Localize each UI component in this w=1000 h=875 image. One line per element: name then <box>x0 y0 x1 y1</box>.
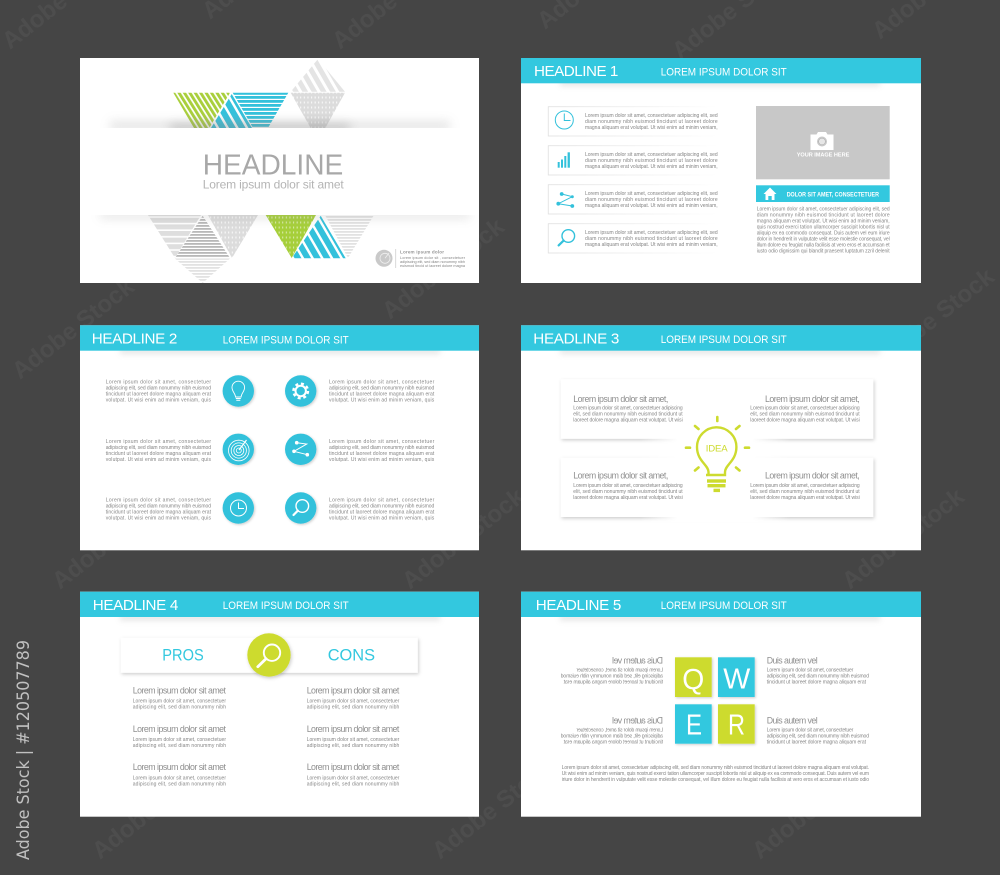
list card 1: diam nonummy nibh euismod tincidunt ut laoreet dolore <box>585 119 718 125</box>
logo icon <box>376 250 392 267</box>
cons item 1: adipiscing elit, sed diam nonummy nibh <box>307 705 400 711</box>
paragraph: dolor in hendrerit in vulputate velit esse molestie consequat, vel <box>757 237 890 243</box>
text block left 1 <box>106 379 212 403</box>
mirrored text block left top: Lorem ipsum dolor sit amet, consectetuer <box>576 667 663 673</box>
text block right bottom: tincidunt ut laoreet dolore magna aliquam erat <box>767 740 867 746</box>
cons item 3: Lorem ipsum dolor sit amet, consectetuer <box>307 775 400 781</box>
heading: HEADLINE 1 <box>534 63 618 80</box>
mirrored text block left top: tincidunt ut laoreet dolore magna aliquam erat <box>563 679 663 685</box>
image placeholder <box>756 106 890 179</box>
paragraph: quis nostrud exerci tation ullamcorper suscipit lobortis nisl ut <box>757 225 890 231</box>
text block right top: Duis autem vel <box>767 655 818 665</box>
text block right 3: tincidunt ut laoreet dolore magna aliquam erat <box>329 510 435 516</box>
list card 3 <box>548 185 718 214</box>
pros cons card <box>121 638 418 673</box>
paragraph: magna aliquam erat volutpat. Ut wisi enim ad minim veniam, <box>757 219 890 225</box>
text block left 1: Lorem ipsum dolor sit amet, consectetuer <box>106 379 211 385</box>
pros item 3: Lorem ipsum dolor sit amet, consectetuer <box>133 775 226 781</box>
panel: slide headline 2 <box>80 325 479 550</box>
text block right top <box>767 655 869 685</box>
bottom triangles <box>148 215 374 283</box>
white headline band <box>80 128 479 215</box>
card 2 text: laoreet dolore magna aliquam erat volutpat. Ut wisi <box>750 418 860 424</box>
watermarks on dark background: Adobe Stock <box>87 753 220 865</box>
card 4 text: laoreet dolore magna aliquam erat volutpat. Ut wisi <box>750 495 860 501</box>
pros item 2 <box>133 724 227 749</box>
tile E: E <box>686 710 702 742</box>
tile Q <box>675 657 712 697</box>
text block left 3: volutpat. Ut wisi enim ad minim veniam, quis <box>106 516 212 522</box>
list card 2: Lorem ipsum dolor sit amet, consectetuer adipiscing elit, sed <box>585 152 718 158</box>
text block right 1: Lorem ipsum dolor sit amet, consectetuer <box>329 379 435 385</box>
panel: slide headline 3 <box>521 325 921 550</box>
icon: magnifier badge <box>247 633 291 677</box>
card 3 text: elit, sed diam nonummy nibh euismod tincidunt ut <box>573 489 683 495</box>
list card 4 <box>548 224 718 253</box>
mirrored text block left top: adipiscing elit, sed diam nonummy nibh euismod <box>560 673 663 679</box>
text block right 3: adipiscing elit, sed diam nonummy nibh euismod <box>329 504 435 510</box>
paragraph: diam nonummy nibh euismod tincidunt ut laoreet dolore <box>757 213 890 219</box>
list card 2: diam nonummy nibh euismod tincidunt ut laoreet dolore <box>585 158 718 164</box>
pros item 1: Lorem ipsum dolor sit amet, consectetuer <box>133 699 226 705</box>
pros item 2: Lorem ipsum dolor sit amet <box>133 724 227 734</box>
card 1 text <box>573 394 683 424</box>
text block right bottom: Duis autem vel <box>767 715 818 725</box>
text block left 2 <box>106 439 212 463</box>
mirrored text block left top <box>560 655 663 685</box>
panel: slide headline 4 <box>80 592 479 817</box>
logo caption: euismod tincid ut laoreet dolore magna <box>400 264 466 268</box>
tile W <box>718 657 755 697</box>
text block right 3: volutpat. Ut wisi enim ad minim veniam, quis <box>329 516 435 522</box>
icon: clock <box>555 111 573 129</box>
text block left 3 <box>106 498 212 522</box>
list card 1: Lorem ipsum dolor sit amet, consectetuer adipiscing elit, sed <box>585 113 718 119</box>
header bar <box>521 325 921 351</box>
watermarks on dark background: Adobe Stock <box>397 483 530 595</box>
label bar text: DOLOR SIT AMET, CONSECTETUER <box>787 191 879 198</box>
cons item 3 <box>307 762 400 787</box>
cons item 1 <box>307 686 400 711</box>
cons item 2: adipiscing elit, sed diam nonummy nibh <box>307 743 400 749</box>
card 3 text <box>573 471 683 501</box>
card 4 text: elit, sed diam nonummy nibh euismod tincidunt ut <box>750 489 860 495</box>
pros item 3 <box>133 762 227 787</box>
card 1 text: laoreet dolore magna aliquam erat volutpat. Ut wisi <box>573 418 683 424</box>
logo caption <box>400 250 466 268</box>
icon: target circle <box>223 434 254 465</box>
text block left 2: tincidunt ut laoreet dolore magna aliquam erat <box>106 451 212 457</box>
icon: light bulb circle <box>223 375 254 407</box>
list card 2 <box>548 146 718 175</box>
card 2 text: Lorem ipsum dolor sit amet, <box>765 394 860 404</box>
tile R <box>718 704 755 744</box>
credit: Adobe Stock id: Adobe Stock | #120507789 <box>14 640 34 860</box>
card row 1 <box>561 379 873 446</box>
watermarks on dark background: Adobe Stock <box>747 753 880 865</box>
paragraph: Lorem ipsum dolor sit amet, consectetuer adipiscing elit, sed <box>757 207 890 213</box>
pros item 1: adipiscing elit, sed diam nonummy nibh <box>133 705 226 711</box>
heading: HEADLINE 2 <box>92 331 177 348</box>
logo caption: Lorem ipsum dolor <box>400 250 444 254</box>
text block right bottom <box>767 715 869 746</box>
pros item 2: Lorem ipsum dolor sit amet, consectetuer <box>133 737 226 743</box>
cover headline: HEADLINE <box>203 149 343 181</box>
bottom paragraph: Lorem ipsum dolor sit amet, consectetuer adipiscing elit, sed diam nonummy nibh euismod tincidunt ut laoreet dolore magna aliquam erat volutpat. <box>562 765 869 771</box>
watermarks on dark background: Adobe Stock <box>7 273 140 385</box>
subheading: LOREM IPSUM DOLOR SIT <box>661 334 787 346</box>
card 3 text: laoreet dolore magna aliquam erat volutpat. Ut wisi <box>573 495 683 501</box>
bottom paragraph: Ut wisi enim ad minim veniam, quis nostrud exerci tation ullamcorper suscipit lobortis nisl ut aliquip ex ea commodo consequat. Duis autem vel eum <box>562 771 869 777</box>
card 2 text: Lorem ipsum dolor sit amet, consectetuer adipiscing <box>750 406 860 412</box>
icon: network <box>557 193 574 207</box>
mirrored text block left bottom: tincidunt ut laoreet dolore magna aliquam erat <box>563 740 663 746</box>
bottom paragraph: iriure dolor in hendrerit in vulputate velit esse molestie consequat, vel illum dolore eu feugiat nulla facilisis at vero eros et accumsan et iusto odio <box>562 777 869 783</box>
text block right top: adipiscing elit, sed diam nonummy nibh euismod <box>767 673 869 679</box>
tile W: W <box>723 664 751 696</box>
heading: HEADLINE 3 <box>533 331 619 348</box>
list card 2: magna aliquam erat volutpat. Ut wisi enim ad minim veniam, <box>585 164 718 170</box>
cons item 1: Lorem ipsum dolor sit amet, consectetuer <box>307 699 400 705</box>
top triangles <box>173 59 345 141</box>
text block left 1: adipiscing elit, sed diam nonummy nibh euismod <box>106 385 211 391</box>
panel: slide headline 1 <box>521 58 921 283</box>
list card 3: diam nonummy nibh euismod tincidunt ut laoreet dolore <box>585 197 718 203</box>
list card 4: Lorem ipsum dolor sit amet, consectetuer adipiscing elit, sed <box>585 230 718 236</box>
text block left 2: adipiscing elit, sed diam nonummy nibh euismod <box>106 445 211 451</box>
text block right 3 <box>329 498 435 522</box>
subheading: LOREM IPSUM DOLOR SIT <box>661 67 787 79</box>
subheading: LOREM IPSUM DOLOR SIT <box>661 600 787 612</box>
logo caption: Lorem ipsum dolor sit , consectetuer <box>400 256 466 260</box>
pros item 3: Lorem ipsum dolor sit amet <box>133 762 227 772</box>
header bar <box>80 592 479 617</box>
text block right 2: adipiscing elit, sed diam nonummy nibh euismod <box>329 445 435 451</box>
tile Q: Q <box>682 664 704 696</box>
list card 1: magna aliquam erat volutpat. Ut wisi enim ad minim veniam, <box>585 125 718 131</box>
header bar <box>521 58 921 83</box>
bottom paragraph <box>562 765 869 783</box>
icon: gear circle <box>285 375 316 407</box>
card 3 text: Lorem ipsum dolor sit amet, consectetuer adipiscing <box>573 483 683 489</box>
text block right top: Lorem ipsum dolor sit amet, consectetuer <box>767 667 854 673</box>
card 1 text: Lorem ipsum dolor sit amet, consectetuer adipiscing <box>573 406 683 412</box>
text block right bottom: Lorem ipsum dolor sit amet, consectetuer <box>767 728 854 734</box>
pros item 2: adipiscing elit, sed diam nonummy nibh <box>133 743 226 749</box>
list card 3: magna aliquam erat volutpat. Ut wisi enim ad minim veniam, <box>585 203 718 209</box>
card 1 text: elit, sed diam nonummy nibh euismod tincidunt ut <box>573 412 683 418</box>
panel: cover slide <box>80 58 479 283</box>
card 1 text: Lorem ipsum dolor sit amet, <box>573 394 668 404</box>
cons item 2: Lorem ipsum dolor sit amet <box>307 724 400 734</box>
text block right 3: Lorem ipsum dolor sit amet, consectetuer <box>329 498 435 504</box>
cons item 3: Lorem ipsum dolor sit amet <box>307 762 400 772</box>
cons label: CONS <box>328 646 375 665</box>
text block left 1: tincidunt ut laoreet dolore magna aliquam erat <box>106 391 212 397</box>
icon: clock circle <box>223 492 254 524</box>
paragraph: illum dolore eu feugiat nulla facilisis at vero eros et accumsan et <box>757 243 890 249</box>
subheading: LOREM IPSUM DOLOR SIT <box>223 334 349 346</box>
text block right 1: tincidunt ut laoreet dolore magna aliquam erat <box>329 391 435 397</box>
subheading: LOREM IPSUM DOLOR SIT <box>223 600 349 612</box>
cover subtitle: Lorem ipsum dolor sit amet <box>203 177 344 191</box>
watermarks on dark background: Adobe Stock <box>377 213 510 325</box>
text block right top: tincidunt ut laoreet dolore magna aliquam erat <box>767 679 867 685</box>
bulb label: IDEA <box>706 443 728 454</box>
text block left 2: volutpat. Ut wisi enim ad minim veniam, quis <box>106 457 212 463</box>
text block left 1: volutpat. Ut wisi enim ad minim veniam, quis <box>106 397 212 403</box>
icon: network circle <box>285 434 316 465</box>
icon: house <box>764 188 776 200</box>
paragraph <box>757 207 890 255</box>
pros item 1 <box>133 686 227 711</box>
text block right 2: volutpat. Ut wisi enim ad minim veniam, quis <box>329 457 435 463</box>
text block right 2: Lorem ipsum dolor sit amet, consectetuer <box>329 439 435 445</box>
mirrored text block left bottom: adipiscing elit, sed diam nonummy nibh euismod <box>560 734 663 740</box>
icon: bar chart <box>558 152 570 168</box>
mirrored text block left top: Duis autem vel <box>612 655 663 665</box>
mirrored text block left bottom: Lorem ipsum dolor sit amet, consectetuer <box>576 728 663 734</box>
text block right 2 <box>329 439 435 463</box>
card 2 text <box>750 394 860 424</box>
cons item 2 <box>307 724 400 749</box>
card 4 text: Lorem ipsum dolor sit amet, <box>765 471 860 481</box>
watermarks on dark background: Adobe Stock <box>47 483 180 595</box>
text block right 1 <box>329 379 435 403</box>
list card 4: diam nonummy nibh euismod tincidunt ut laoreet dolore <box>585 236 718 242</box>
heading: HEADLINE 4 <box>93 597 178 614</box>
cons item 3: adipiscing elit, sed diam nonummy nibh <box>307 781 400 787</box>
pros item 3: adipiscing elit, sed diam nonummy nibh <box>133 781 226 787</box>
card 2 text: elit, sed diam nonummy nibh euismod tincidunt ut <box>750 412 860 418</box>
watermarks on dark background: Adobe Stock <box>427 753 560 865</box>
icon: magnifier <box>559 230 575 245</box>
text block left 3: adipiscing elit, sed diam nonummy nibh euismod <box>106 504 211 510</box>
paragraph: iusto odio dignissim qui blandit praesent luptatum zzril delenit <box>757 249 890 255</box>
text block right 1: volutpat. Ut wisi enim ad minim veniam, quis <box>329 397 435 403</box>
pros item 1: Lorem ipsum dolor sit amet <box>133 686 227 696</box>
pros label: PROS <box>162 646 204 665</box>
list card 4: magna aliquam erat volutpat. Ut wisi enim ad minim veniam, <box>585 242 718 248</box>
text block right bottom: adipiscing elit, sed diam nonummy nibh euismod <box>767 734 869 740</box>
text block left 2: Lorem ipsum dolor sit amet, consectetuer <box>106 439 211 445</box>
icon: camera <box>810 132 834 150</box>
mirrored text block left bottom <box>560 715 663 746</box>
blue label bar <box>756 185 890 202</box>
paragraph: aliquip ex ea commodo consequat. Duis autem vel eum iriure <box>757 231 890 237</box>
header bar <box>521 592 921 617</box>
tile R: R <box>728 710 745 742</box>
image caption: YOUR IMAGE HERE <box>797 152 850 158</box>
text block right 2: tincidunt ut laoreet dolore magna aliquam erat <box>329 451 435 457</box>
text block right 1: adipiscing elit, sed diam nonummy nibh euismod <box>329 385 435 391</box>
heading: HEADLINE 5 <box>536 597 621 614</box>
tile E <box>675 704 712 744</box>
cons item 1: Lorem ipsum dolor sit amet <box>307 686 400 696</box>
watermarks on dark background: Adobe Stock <box>837 483 970 595</box>
mirrored text block left bottom: Duis autem vel <box>612 715 663 725</box>
card row 2 <box>561 450 873 522</box>
list card 3: Lorem ipsum dolor sit amet, consectetuer adipiscing elit, sed <box>585 191 718 197</box>
icon: magnifier circle <box>285 492 316 524</box>
panel: slide headline 5 <box>521 592 921 817</box>
icon: idea bulb <box>686 417 749 492</box>
header bar <box>80 325 479 351</box>
text block left 3: tincidunt ut laoreet dolore magna aliquam erat <box>106 510 212 516</box>
list card 1 <box>548 107 718 136</box>
card 4 text: Lorem ipsum dolor sit amet, consectetuer adipiscing <box>750 483 860 489</box>
cons item 2: Lorem ipsum dolor sit amet, consectetuer <box>307 737 400 743</box>
card 3 text: Lorem ipsum dolor sit amet, <box>573 471 668 481</box>
logo caption: adipiscing elit, sed diam nonummy nibh <box>400 260 465 264</box>
watermarks on dark background: Adobe Stock <box>867 263 1000 375</box>
card 4 text <box>750 471 860 501</box>
text block left 3: Lorem ipsum dolor sit amet, consectetuer <box>106 498 211 504</box>
